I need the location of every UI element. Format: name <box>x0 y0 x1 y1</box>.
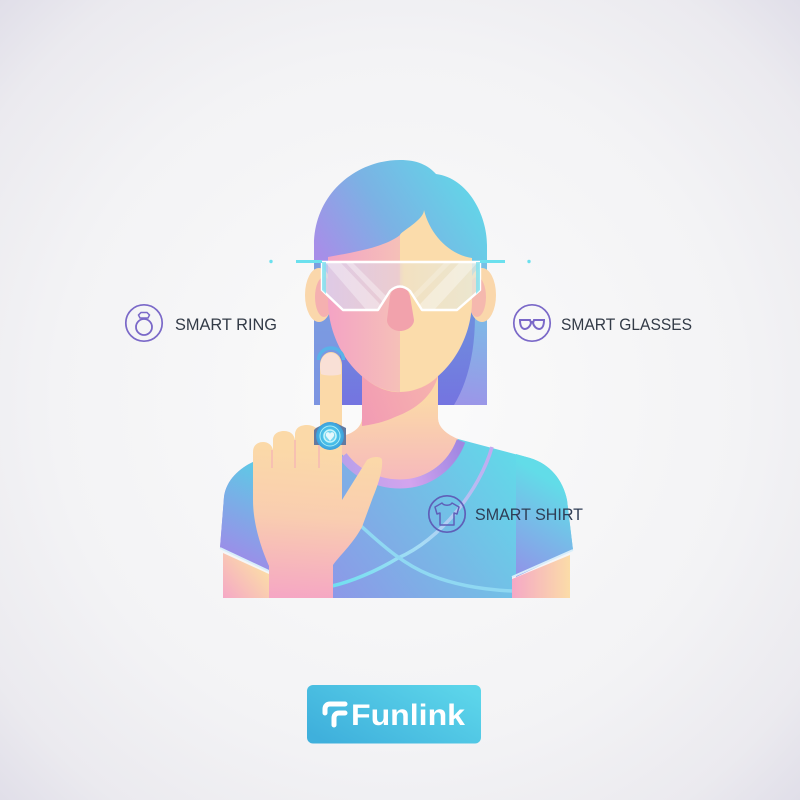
shirt seams <box>332 447 512 591</box>
label: smart shirt: SMART SHIRT <box>475 506 583 524</box>
smart ring device <box>314 422 346 450</box>
neck <box>336 370 470 490</box>
icon: logo mark <box>325 704 345 725</box>
logo badge: Funlink <box>307 685 481 744</box>
fingertip touch arc <box>318 348 344 360</box>
hand with raised index finger <box>253 352 382 598</box>
skin at neckline and collar <box>338 418 461 484</box>
glasses scan line <box>269 260 531 263</box>
callout: smart glasses <box>514 305 692 341</box>
icon: shirt <box>429 496 465 532</box>
face <box>328 210 472 392</box>
nose <box>387 285 414 331</box>
callout: smart ring <box>126 305 277 341</box>
ears <box>305 268 496 322</box>
icon: ring <box>126 305 162 341</box>
hair <box>314 160 487 405</box>
arms <box>220 548 573 598</box>
label: smart ring: SMART RING <box>175 316 277 334</box>
neck shadow <box>362 376 438 426</box>
smart glasses visor <box>320 260 482 312</box>
icon: glasses <box>514 305 550 341</box>
illustration: woman wearing smart devices <box>220 160 573 598</box>
wordmark: Funlink <box>351 699 465 732</box>
callout: smart shirt <box>429 496 583 532</box>
shirt <box>220 439 573 598</box>
label: smart glasses: SMART GLASSES <box>561 316 692 334</box>
